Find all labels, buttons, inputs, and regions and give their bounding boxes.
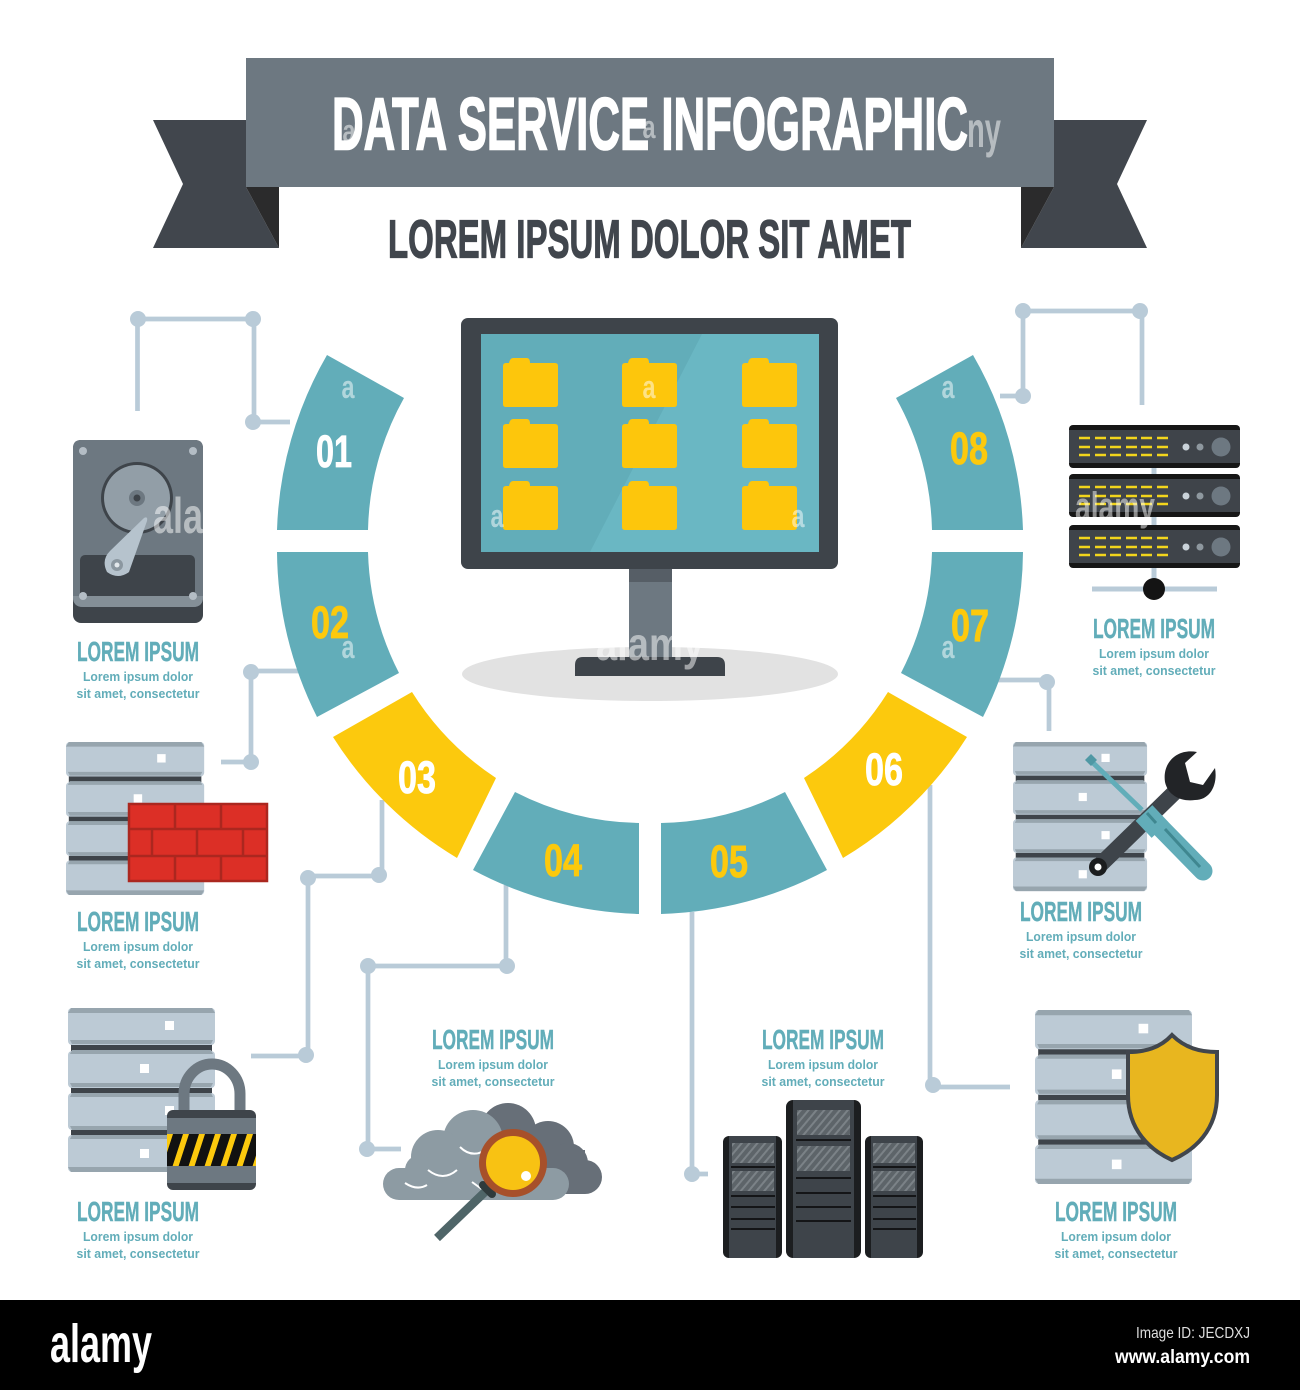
icon: server with shield	[1035, 1010, 1217, 1184]
ring segment 01	[277, 355, 404, 530]
ring segment 01: 01	[316, 426, 352, 477]
label: shield: sit amet, consectetur	[1054, 1247, 1178, 1261]
ribbon: right tail	[1021, 120, 1147, 248]
watermark: a	[342, 369, 355, 405]
label: firewall: LOREM IPSUM	[77, 906, 199, 937]
ribbon: left tail	[153, 120, 279, 248]
ring segment 02	[277, 552, 399, 717]
ring segment 04: 04	[544, 835, 582, 886]
icon: server with tools	[1013, 742, 1216, 891]
icon: hard disk	[73, 440, 203, 623]
label: shield: LOREM IPSUM	[1055, 1196, 1177, 1227]
icon: rack servers	[1069, 425, 1240, 600]
label: tower servers: Lorem ipsum dolor	[768, 1058, 878, 1072]
label: firewall	[76, 906, 200, 971]
label: disk: Lorem ipsum dolor	[83, 670, 193, 684]
ring segment 08	[896, 355, 1023, 530]
watermark: alamy	[1075, 485, 1156, 529]
watermark: a	[792, 498, 805, 534]
label: tower servers	[762, 1024, 885, 1089]
ring segment 05	[661, 792, 827, 914]
ring segment 07	[901, 552, 1023, 717]
label: disk: LOREM IPSUM	[77, 636, 199, 667]
label: tools: LOREM IPSUM	[1020, 896, 1142, 927]
subtitle: LOREM IPSUM DOLOR SIT AMET	[388, 210, 911, 270]
label: rack servers: sit amet, consectetur	[1092, 664, 1216, 678]
label: shield: Lorem ipsum dolor	[1061, 1230, 1171, 1244]
ring segment 03: 03	[398, 752, 436, 803]
label: disk	[76, 636, 200, 701]
label: cloud search	[432, 1024, 555, 1089]
footer bar: www.alamy.com	[1114, 1347, 1250, 1368]
watermark: a	[642, 369, 656, 405]
watermark: a	[642, 109, 656, 145]
footer bar: alamy	[50, 1314, 152, 1374]
label: rack servers: Lorem ipsum dolor	[1099, 647, 1209, 661]
label: rack servers: LOREM IPSUM	[1093, 613, 1215, 644]
icon: server with firewall	[66, 742, 268, 895]
ring segment 03	[333, 692, 496, 858]
watermark: alamy	[596, 618, 704, 670]
watermark: a	[490, 498, 504, 534]
label: padlock	[76, 1196, 200, 1261]
label: tools	[1020, 896, 1143, 961]
label: tower servers: sit amet, consectetur	[762, 1075, 885, 1089]
label: disk: sit amet, consectetur	[76, 687, 200, 701]
watermark: ny	[967, 102, 1001, 158]
label: padlock: LOREM IPSUM	[77, 1196, 199, 1227]
watermark: a	[342, 113, 356, 149]
ring segment 06: 06	[865, 744, 903, 795]
label: padlock: Lorem ipsum dolor	[83, 1230, 193, 1244]
label: cloud search: Lorem ipsum dolor	[438, 1058, 548, 1072]
icon: server with padlock	[68, 1008, 256, 1190]
watermark: a	[942, 629, 955, 665]
label: padlock: sit amet, consectetur	[76, 1247, 200, 1261]
ring segment 04	[473, 792, 639, 914]
ring segment 07: 07	[951, 600, 989, 651]
footer bar	[0, 1300, 1300, 1390]
label: tools: Lorem ipsum dolor	[1026, 930, 1136, 944]
watermark: a	[942, 369, 955, 405]
label: cloud search: LOREM IPSUM	[432, 1024, 554, 1055]
banner	[246, 58, 1054, 187]
label: firewall: sit amet, consectetur	[76, 957, 200, 971]
icon: tower servers	[723, 1100, 923, 1258]
watermark	[153, 102, 1156, 670]
watermark: a	[342, 629, 355, 665]
label: rack servers	[1092, 613, 1216, 678]
label: firewall: Lorem ipsum dolor	[83, 940, 193, 954]
watermark: ala	[153, 488, 204, 544]
ring segment 05: 05	[710, 836, 748, 887]
label: tower servers: LOREM IPSUM	[762, 1024, 884, 1055]
ring segment 06	[804, 692, 967, 858]
label: tools: sit amet, consectetur	[1020, 947, 1143, 961]
connector lines	[130, 303, 1148, 1182]
ring segment 02: 02	[311, 597, 349, 648]
monitor with folders	[461, 318, 838, 701]
ring segment 08: 08	[950, 423, 988, 474]
label: shield	[1054, 1196, 1178, 1261]
label: cloud search: sit amet, consectetur	[432, 1075, 555, 1089]
footer bar: Image ID: JECDXJ	[1136, 1325, 1250, 1342]
icon: cloud with magnifier	[383, 1103, 602, 1238]
